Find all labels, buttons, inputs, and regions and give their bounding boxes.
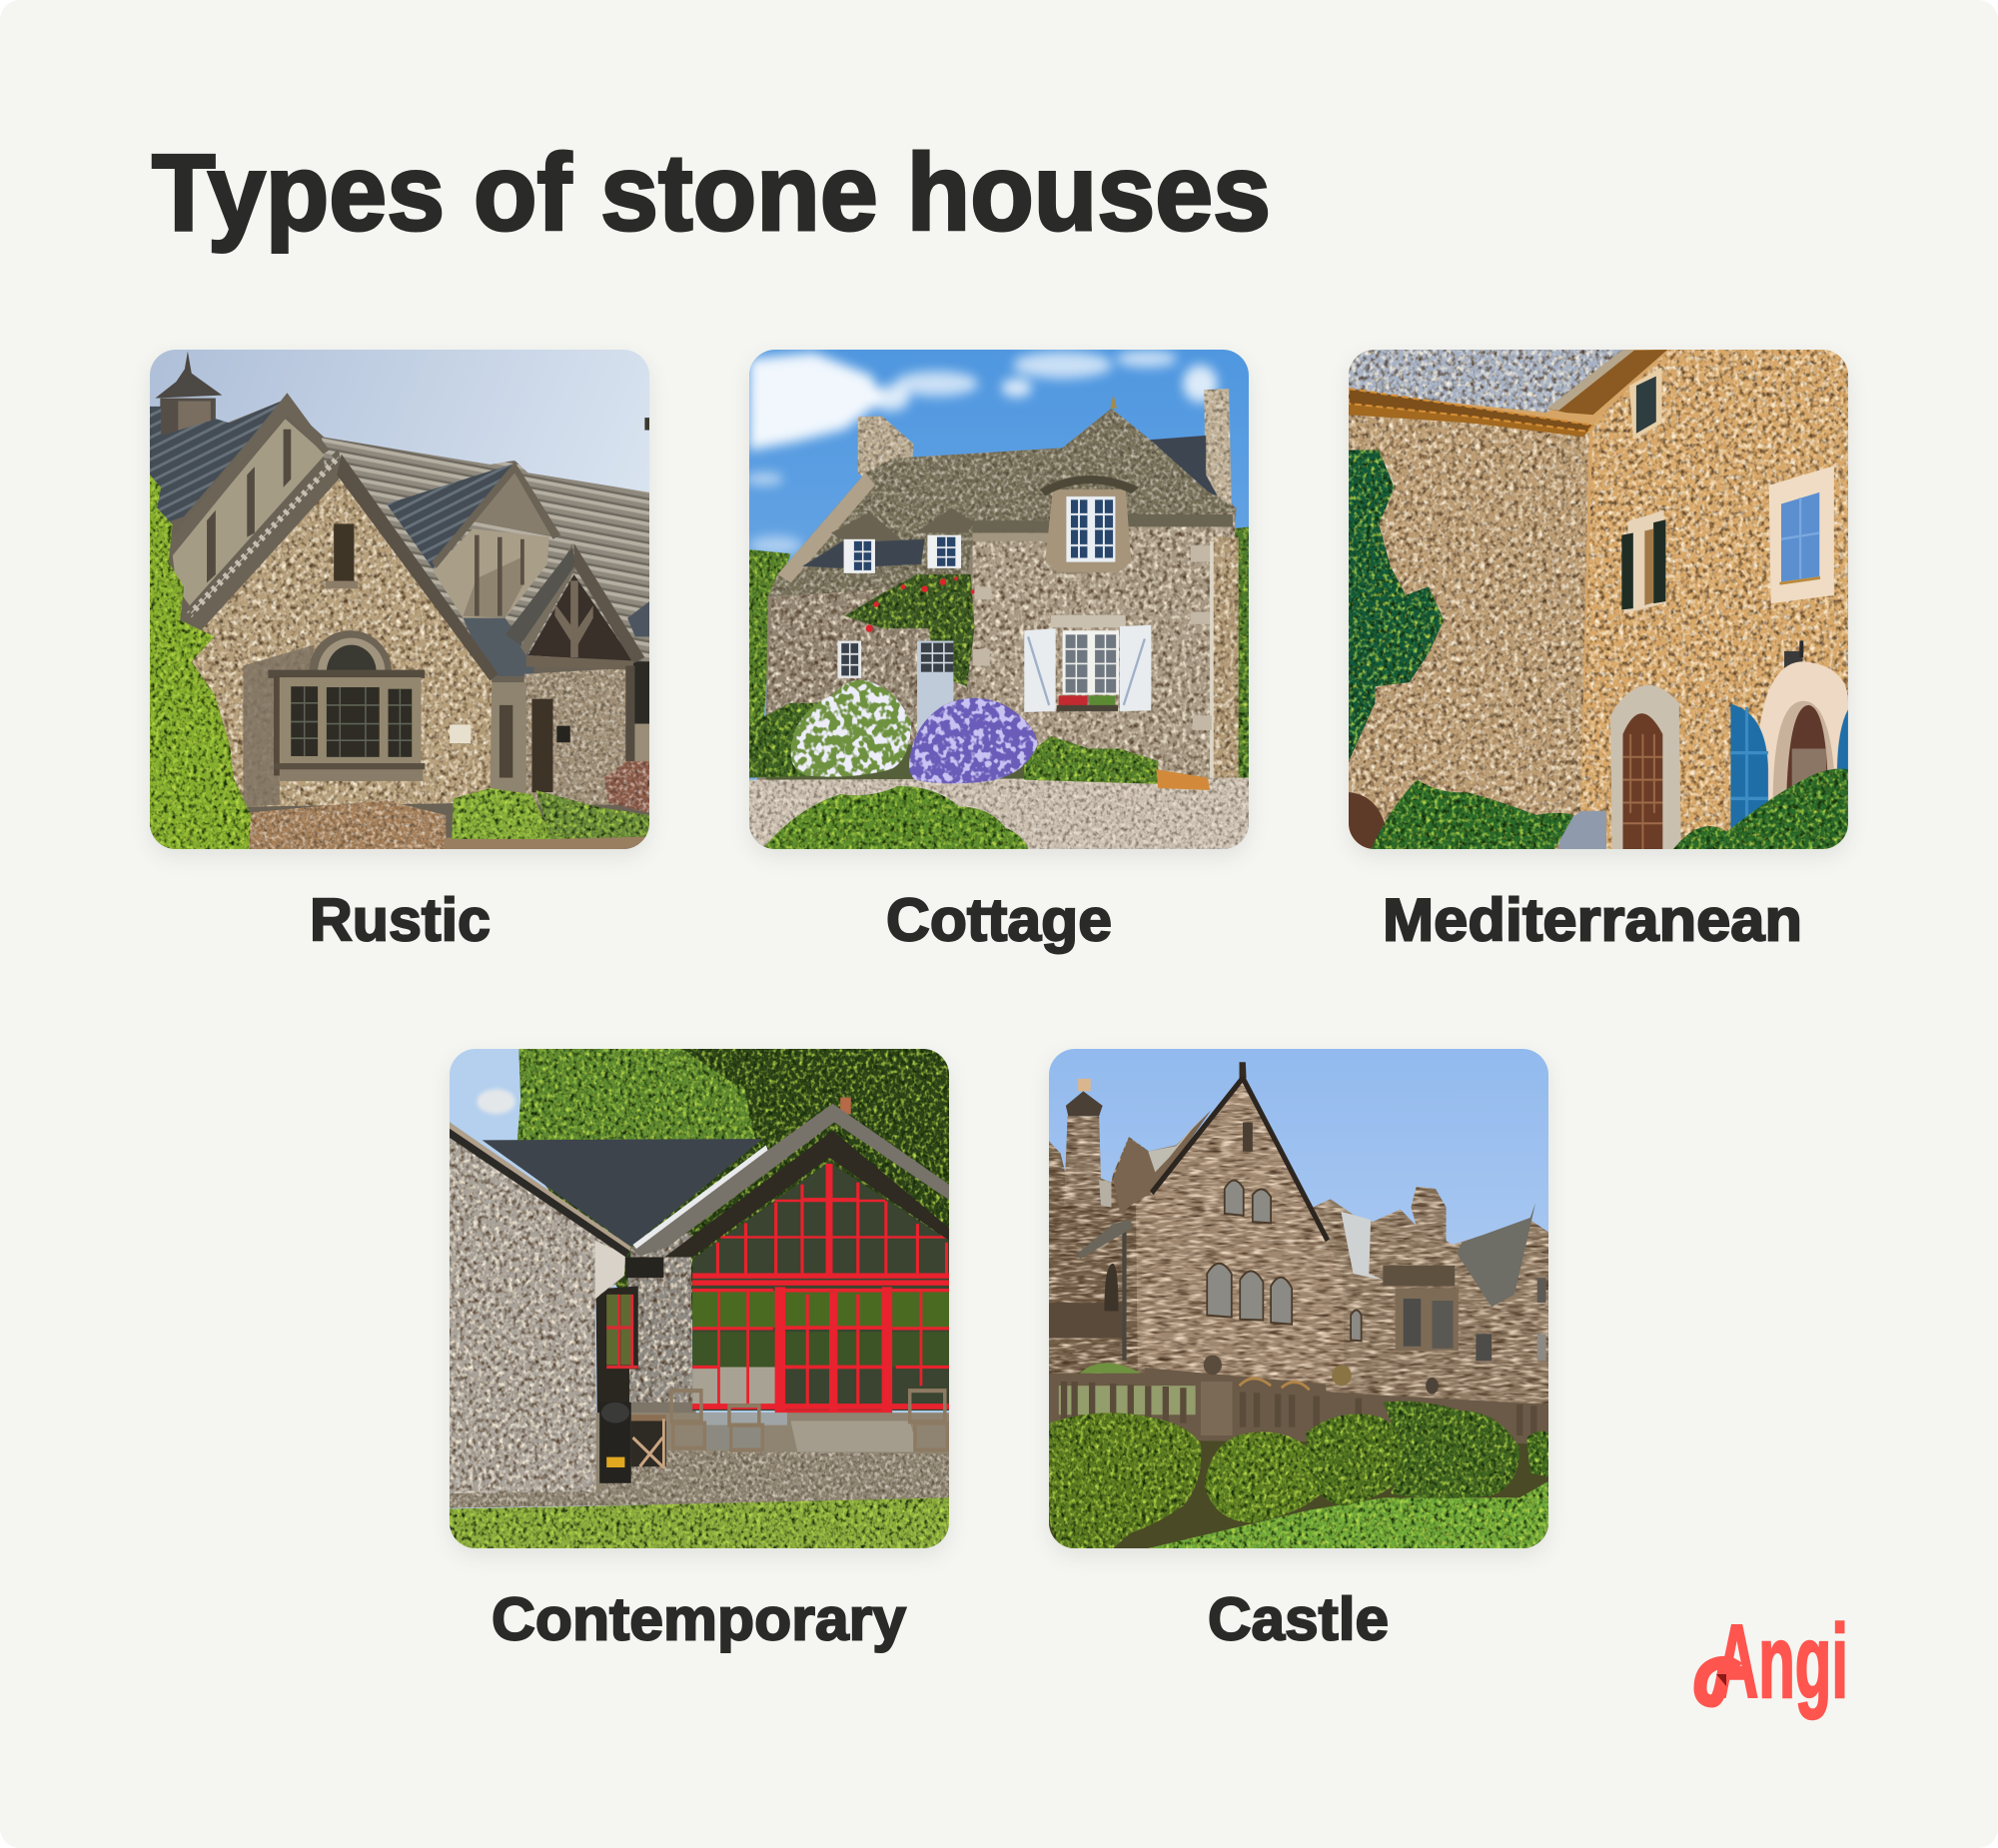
clouds bbox=[745, 351, 1218, 554]
stone dressing bbox=[974, 587, 992, 599]
base of planting bbox=[766, 744, 1034, 782]
photo: stone castle bbox=[1049, 1049, 1548, 1548]
bay window bbox=[309, 630, 392, 713]
red conservatory glass bbox=[692, 1162, 949, 1410]
grass bbox=[1148, 1481, 1548, 1548]
door bbox=[1610, 685, 1681, 849]
logo loop bbox=[1700, 1662, 1738, 1701]
panel: Castle bbox=[1045, 1049, 1552, 1652]
shrubs along wall bbox=[1024, 736, 1158, 784]
side trees bbox=[749, 549, 791, 778]
chair bbox=[1558, 811, 1606, 849]
back roof bbox=[1151, 436, 1218, 495]
mountain bbox=[1349, 350, 1627, 413]
shuttered window bbox=[1051, 615, 1126, 627]
label: Rustic: Rustic bbox=[310, 887, 491, 953]
climbing roses bbox=[844, 574, 974, 686]
stone wall middle bbox=[625, 1233, 692, 1402]
main roof bbox=[768, 409, 1237, 596]
title: Types of stone houses bbox=[152, 132, 1271, 254]
bushes bbox=[1372, 780, 1573, 849]
gravel bbox=[749, 778, 1249, 849]
hydrangea right bbox=[909, 698, 1038, 783]
balcony bbox=[1383, 1266, 1455, 1287]
dormer bbox=[387, 463, 514, 568]
logo fold bbox=[1716, 1674, 1726, 1686]
trees bbox=[517, 1049, 949, 1320]
lower dormer roof bbox=[464, 618, 533, 676]
base of planting bbox=[1049, 1423, 1548, 1548]
porch bbox=[524, 668, 633, 805]
top window bbox=[1629, 367, 1662, 440]
left wall bbox=[766, 582, 973, 744]
grass bbox=[450, 1497, 949, 1548]
white arch bbox=[1755, 661, 1848, 807]
left wall bbox=[1349, 411, 1589, 849]
tree bbox=[1349, 450, 1444, 761]
gable barge bbox=[664, 1131, 949, 1257]
photo: stone cottage bbox=[749, 350, 1249, 849]
blue window bbox=[1769, 465, 1834, 603]
small dormers bbox=[831, 512, 904, 545]
tree bbox=[150, 474, 251, 849]
label: Cottage: Cottage bbox=[886, 887, 1112, 953]
hydrangea left bbox=[791, 680, 911, 777]
label: Castle: Castle bbox=[1208, 1586, 1389, 1652]
grill bbox=[599, 1402, 631, 1483]
panel: Contemporary bbox=[446, 1049, 953, 1653]
stone wall left bbox=[450, 1135, 625, 1493]
balustrade bbox=[1049, 1374, 1548, 1443]
label: Contemporary: Contemporary bbox=[492, 1586, 907, 1652]
middle window bbox=[1623, 510, 1663, 614]
far right bbox=[627, 601, 649, 636]
logo wordmark: Angi bbox=[1715, 1604, 1848, 1720]
panel: Rustic bbox=[146, 350, 653, 953]
panel: Cottage bbox=[745, 350, 1848, 955]
bushes bbox=[1049, 1412, 1201, 1548]
main gable bbox=[1136, 1078, 1345, 1386]
foreground bush bbox=[762, 786, 1028, 849]
chairs bbox=[671, 1390, 947, 1450]
photo: mediterranean stone house bbox=[1349, 350, 1848, 849]
terrace bbox=[596, 1412, 949, 1499]
cupola bbox=[155, 352, 222, 399]
main stone gable bbox=[176, 472, 492, 807]
chimneys bbox=[858, 416, 913, 485]
panel: Mediterranean bbox=[1024, 350, 1852, 953]
blue shutters bbox=[1730, 704, 1768, 840]
right chimney bbox=[1411, 1187, 1447, 1243]
left wing bbox=[1049, 1137, 1152, 1374]
label: Mediterranean: Mediterranean bbox=[1383, 887, 1802, 953]
back roof bbox=[322, 437, 649, 661]
photo: rustic stone house bbox=[150, 350, 649, 849]
back right wing bbox=[1313, 1199, 1548, 1406]
right wall bbox=[1579, 350, 1848, 849]
eaves bbox=[1349, 389, 1593, 437]
logo: Angi bbox=[1694, 1604, 1848, 1720]
lower left window and door bbox=[837, 641, 861, 678]
barge left bbox=[450, 1123, 631, 1257]
gable windows bbox=[1207, 1181, 1362, 1341]
photo: contemporary stone house bbox=[450, 1049, 949, 1548]
slate roof bbox=[483, 1139, 762, 1247]
low arch window bbox=[1349, 792, 1385, 849]
main wall bbox=[973, 512, 1239, 784]
steps bbox=[790, 1421, 918, 1452]
main dormer bbox=[1045, 489, 1131, 572]
upper left roof and gable bbox=[150, 401, 284, 528]
shrubs bbox=[245, 800, 446, 849]
dark lintel and door bbox=[625, 1257, 663, 1278]
table bbox=[631, 1414, 666, 1421]
lantern bbox=[1784, 651, 1802, 670]
